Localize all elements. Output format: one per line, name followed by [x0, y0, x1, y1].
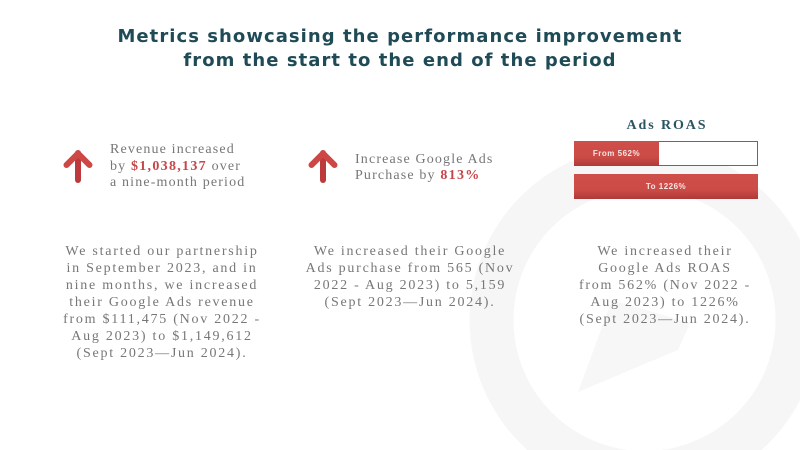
- bar: from 562%: [574, 141, 758, 166]
- title: from the start to the end of the period: [183, 50, 617, 70]
- title: Metrics showcasing the performance improvement: [117, 26, 683, 47]
- revenue description: their Google Ads revenue: [69, 295, 255, 310]
- revenue description: nine months, we increased: [66, 278, 258, 293]
- purchase metric text: Purchase by 813%: [355, 168, 481, 183]
- ROAS description: (Sept 2023—Jun 2024).: [580, 312, 750, 327]
- revenue description: (Sept 2023—Jun 2024).: [77, 346, 247, 361]
- purchase metric text: [355, 152, 493, 183]
- bar: from 562%: From 562%: [593, 149, 640, 158]
- bar: to 1226%: To 1226%: [646, 182, 686, 191]
- revenue metric text: [110, 142, 245, 190]
- revenue metric text: by $1,038,137 over: [110, 159, 241, 174]
- purchase description: [306, 244, 514, 310]
- ROAS description: Aug 2023) to 1226%: [590, 295, 740, 310]
- ROAS description: from 562% (Nov 2022 -: [579, 278, 751, 293]
- icon: purchase up arrow: [308, 150, 338, 183]
- ROAS heading: Ads ROAS: [627, 118, 707, 133]
- ROAS description: We increased their: [597, 244, 733, 259]
- icon: revenue up arrow: [64, 150, 92, 183]
- title: [117, 26, 683, 70]
- purchase description: We increased their Google: [314, 244, 506, 259]
- revenue metric text: Revenue increased: [110, 142, 235, 157]
- revenue description: Aug 2023) to $1,149,612: [71, 329, 253, 344]
- purchase description: Ads purchase from 565 (Nov: [306, 261, 514, 276]
- revenue description: We started our partnership: [65, 244, 259, 259]
- revenue metric text: a nine-month period: [110, 175, 245, 190]
- revenue description: [63, 244, 261, 361]
- purchase metric text: Increase Google Ads: [355, 152, 493, 166]
- revenue description: from $111,475 (Nov 2022 -: [63, 312, 261, 327]
- revenue description: in September 2023, and in: [66, 261, 258, 276]
- purchase description: (Sept 2023—Jun 2024).: [325, 295, 495, 310]
- bar: to 1226%: [574, 174, 758, 199]
- purchase description: 2022 - Aug 2023) to 5,159: [314, 278, 506, 293]
- ROAS description: [579, 244, 751, 327]
- ROAS description: Google Ads ROAS: [598, 261, 732, 276]
